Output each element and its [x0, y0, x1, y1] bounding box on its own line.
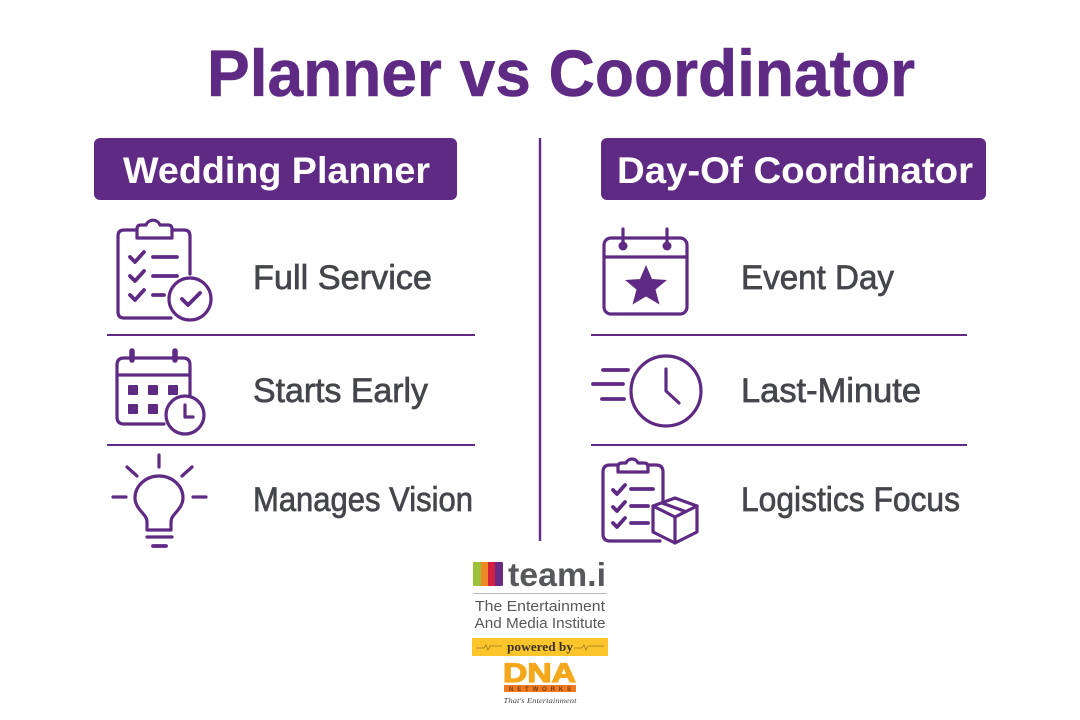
logo: DNA — [503, 658, 578, 705]
label: logistics focus: Logistics Focus — [741, 481, 960, 519]
wordmark: team.i — [508, 556, 606, 593]
powered by banner — [472, 638, 608, 656]
label: starts early: Starts Early — [253, 372, 428, 410]
logo: team.i — [472, 556, 608, 705]
heading: day-of coordinator — [601, 138, 986, 200]
tagline: The Entertainment — [475, 599, 605, 615]
logo: DNA: DNA — [503, 658, 576, 688]
heading: wedding planner: Wedding Planner — [123, 150, 430, 191]
label: full service: Full Service — [253, 259, 432, 297]
label: event day: Event Day — [741, 259, 894, 297]
title: Planner vs Coordinator — [207, 36, 915, 110]
icon: light bulb — [113, 455, 206, 546]
icon: calendar with clock — [117, 351, 204, 434]
icon: calendar with star — [604, 229, 687, 314]
logo: DNA: That's Entertainment — [504, 696, 578, 705]
logo mark — [473, 562, 503, 586]
logo: DNA: NETWORKS — [509, 687, 571, 693]
label: last-minute: Last-Minute — [741, 372, 921, 410]
icon: clock with speed lines — [593, 356, 701, 426]
panel: day-of coordinator — [591, 138, 986, 543]
label: manages vision: Manages Vision — [253, 481, 473, 519]
center divider — [539, 138, 541, 541]
heading: wedding planner — [94, 138, 457, 200]
icon: clipboard with box — [603, 459, 697, 543]
tagline line two: And Media Institute — [474, 616, 606, 632]
heading: day-of coordinator: Day-Of Coordinator — [617, 150, 973, 191]
icon: clipboard with check — [118, 220, 211, 320]
powered by banner: powered by — [507, 639, 574, 654]
panel: wedding planner — [94, 138, 475, 546]
